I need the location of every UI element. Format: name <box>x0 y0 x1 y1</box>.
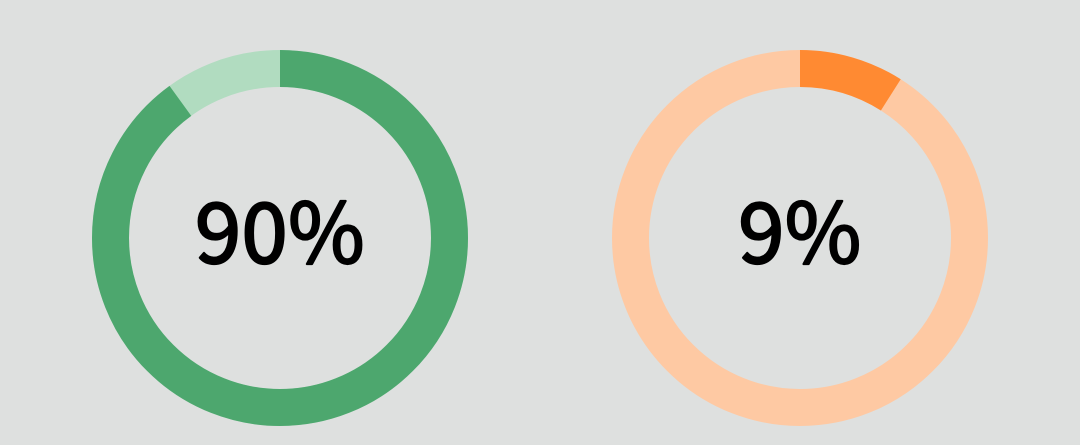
remaining segment: light orange <box>630 68 970 408</box>
remaining segment: light green <box>110 68 450 408</box>
donut chart: 90% <box>110 68 450 408</box>
value segment: 90% green <box>110 68 450 408</box>
label: 90%: 90% <box>195 167 365 287</box>
value segment: 9% orange <box>630 68 970 408</box>
donut chart: 9% <box>630 68 970 408</box>
label: 9%: 9% <box>738 167 862 287</box>
